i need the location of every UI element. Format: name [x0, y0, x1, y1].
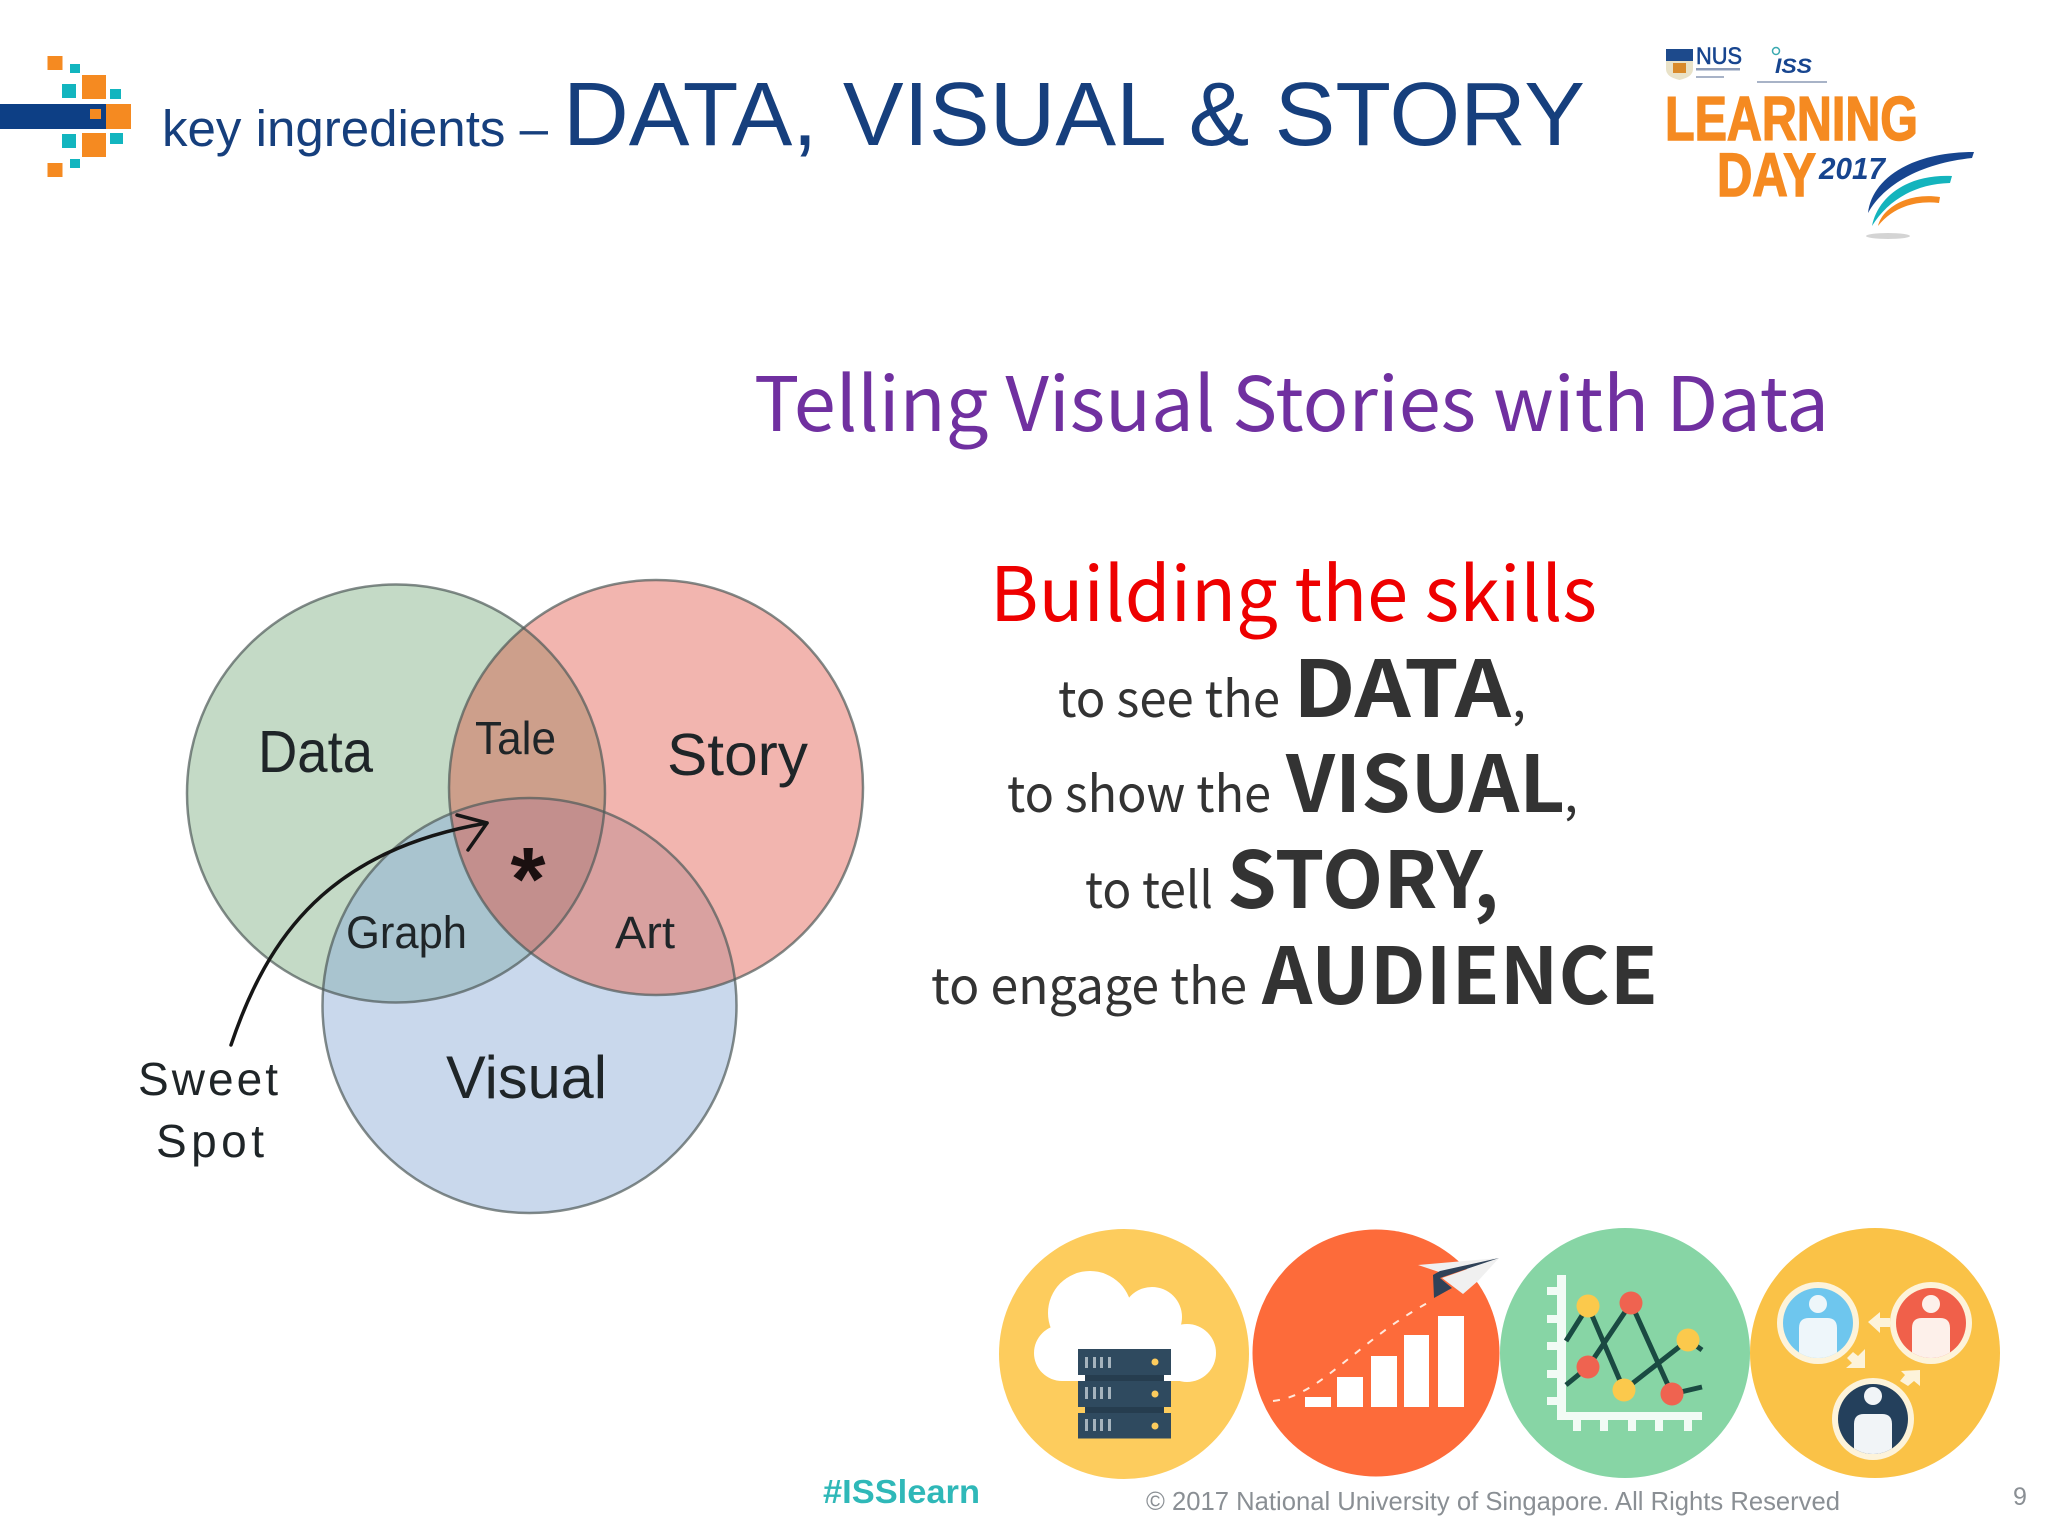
logo: DAY: DAY: [1717, 141, 1816, 209]
line: to show the visual: [1007, 723, 1578, 835]
venn circle: story: [449, 580, 863, 995]
exchange arrows: [1846, 1312, 1920, 1386]
venn outlines: [187, 580, 863, 1213]
venn overlap: art: [532, 812, 734, 995]
venn overlap: sweet spot: [452, 799, 603, 952]
line: to see the data: to see the: [1058, 660, 1280, 732]
line: to tell story: STORY,: [1227, 819, 1499, 931]
text block: building the skills: [931, 534, 1658, 1027]
venn label: Tale: Tale: [475, 712, 556, 764]
copyright: © 2017 National University of Singapore. All Rights Reserved: [1146, 1486, 1840, 1516]
venn circle: visual: [322, 798, 736, 1213]
title prefix: key ingredients –: [162, 100, 549, 157]
line: to engage the audience: [931, 915, 1658, 1027]
logo: ISS wordmark: ISS: [1775, 55, 1812, 78]
paper plane: [1418, 1258, 1499, 1298]
logo: NUS wordmark: NUS: [1696, 43, 1742, 70]
dashed flight path: [1273, 1300, 1433, 1401]
logo: swooshes: [1866, 152, 1974, 239]
venn label: Art: Art: [615, 907, 676, 958]
chart lines: [1566, 1303, 1702, 1394]
page number: 9: [2013, 1483, 2027, 1511]
label: Sweet Spot: Spot: [156, 1115, 264, 1167]
venn centre asterisk: *: [510, 830, 546, 930]
icon: cloud server: [999, 1229, 1249, 1479]
line: to show the visual: to show the: [1007, 755, 1271, 827]
line: to engage the audience: AUDIENCE: [1261, 915, 1658, 1027]
logo: LEARNING: LEARNING: [1665, 85, 1918, 154]
venn diagram: [138, 580, 863, 1213]
line: to see the data: [1058, 628, 1526, 740]
venn overlap: tale: [449, 629, 605, 813]
venn label: Story: Story: [667, 722, 808, 788]
title: [162, 65, 1585, 165]
line: to engage the audience: to engage the: [931, 947, 1247, 1019]
arrow: sweet spot: [231, 815, 487, 1045]
venn label: Data: Data: [258, 719, 373, 785]
venn circle: data: [187, 584, 605, 1002]
line: to see the data: DATA: [1293, 628, 1512, 740]
logo: NUS crest: [1666, 49, 1693, 80]
line: to see the data: ,: [1512, 660, 1526, 732]
cloud: [1034, 1271, 1216, 1382]
line: to tell story: to tell: [1085, 851, 1213, 923]
venn label: Graph: Graph: [346, 907, 467, 958]
server rack: [1078, 1349, 1171, 1438]
line: to tell story: [1085, 819, 1499, 931]
icon: audience network: [1750, 1228, 2000, 1478]
person: navy: [1832, 1378, 1914, 1460]
person: blue: [1777, 1282, 1859, 1365]
bars: [1305, 1316, 1464, 1407]
title main: DATA, VISUAL & STORY: [563, 65, 1585, 165]
chart points: [1576, 1292, 1700, 1406]
label: Sweet Spot: Sweet: [138, 1053, 278, 1105]
person: red: [1890, 1282, 1972, 1365]
line: to show the visual: VISUAL: [1285, 723, 1565, 835]
logo: NUS ISS Learning Day 2017: [1665, 43, 1974, 239]
venn label: Visual: Visual: [446, 1044, 607, 1111]
icon: growth bars with paper plane: [1252, 1230, 1500, 1476]
label: Sweet Spot: [138, 1053, 278, 1167]
chart axes: [1547, 1275, 1702, 1431]
hashtag: #ISSlearn: [823, 1473, 980, 1510]
heading: building the skills: Building the skills: [990, 534, 1597, 643]
icon: line chart: [1500, 1228, 1750, 1478]
logo: ISS wordmark: [1757, 48, 1827, 83]
subtitle: Telling Visual Stories with Data: [754, 344, 1829, 453]
icon: ISS pixel arrow logo: [0, 56, 131, 177]
line: to show the visual: ,: [1564, 755, 1578, 827]
venn overlap: graph: [324, 814, 530, 1002]
logo: 2017: 2017: [1818, 151, 1887, 186]
